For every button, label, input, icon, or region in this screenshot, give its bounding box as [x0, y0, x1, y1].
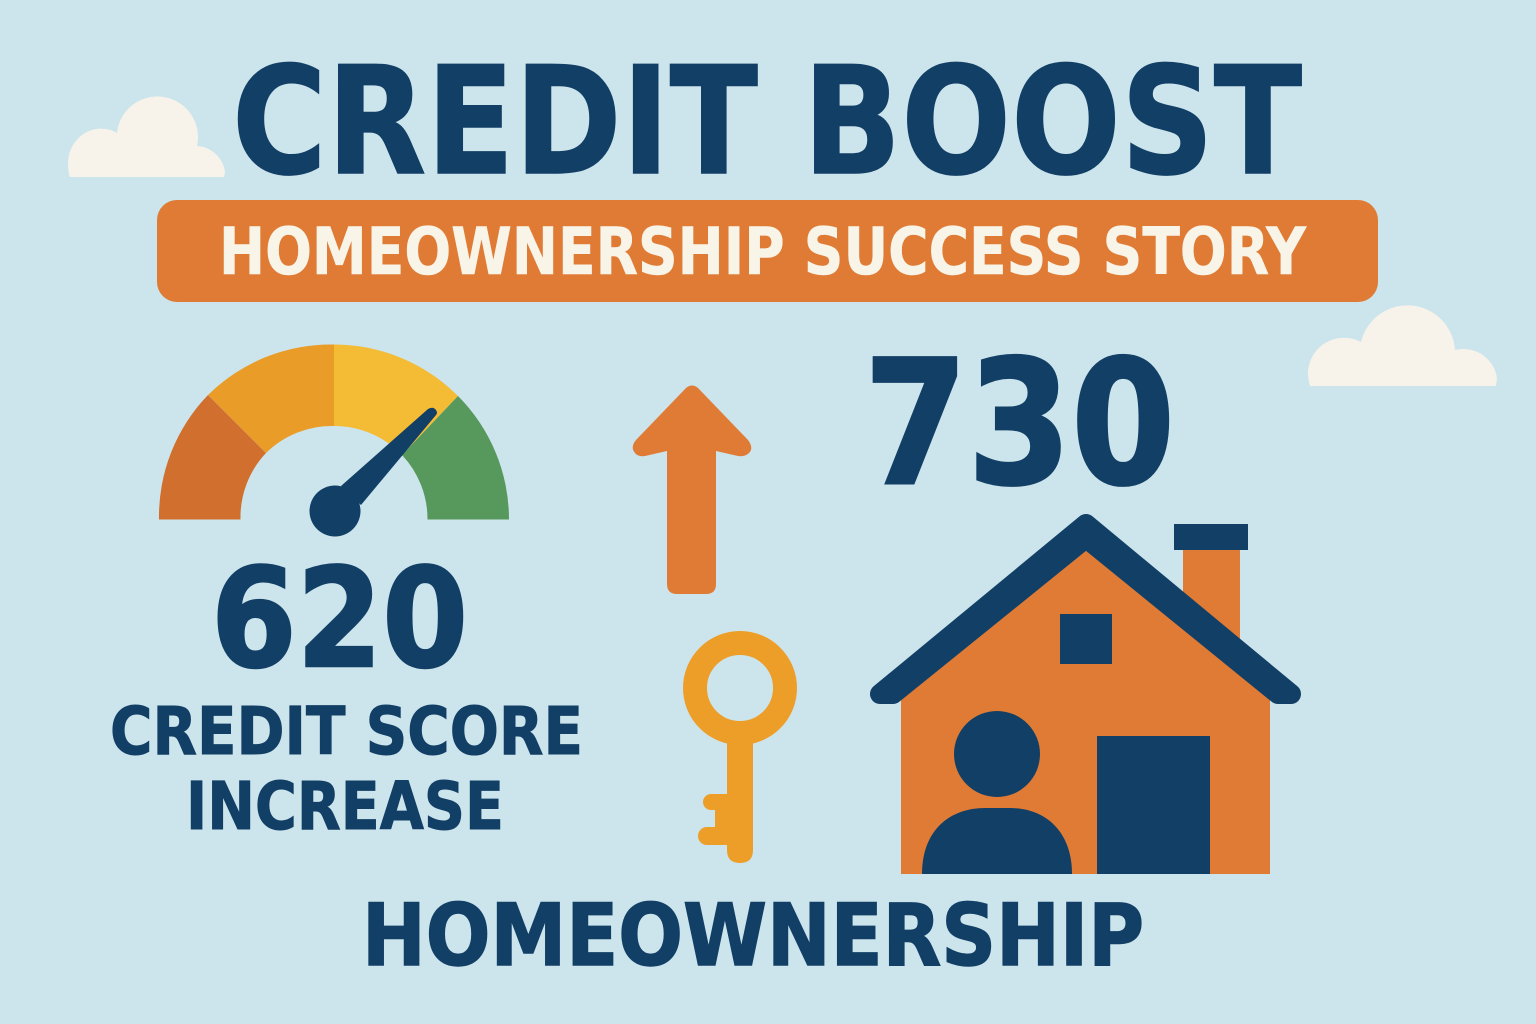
icon: key — [695, 643, 785, 863]
gauge needle — [310, 408, 437, 536]
gauge segment: yellow — [334, 344, 458, 455]
score 730: 730 — [864, 323, 1175, 524]
label: homeownership: HOMEOWNERSHIP — [362, 886, 1144, 986]
score 620: 620 — [211, 540, 468, 699]
label: credit score increase: CREDIT SCORE — [110, 693, 583, 770]
roof — [880, 524, 1291, 694]
gauge segment: red — [159, 395, 266, 520]
house body — [901, 540, 1270, 874]
icon: cloud right — [1308, 305, 1497, 386]
gauge segment: orange — [208, 344, 334, 453]
subtitle text: HOMEOWNERSHIP SUCCESS STORY — [219, 215, 1307, 290]
gauge — [159, 344, 509, 536]
window — [1060, 614, 1112, 664]
title: CREDIT BOOST — [232, 36, 1302, 209]
person — [922, 711, 1072, 874]
gauge segment: green — [402, 396, 509, 520]
subtitle banner — [157, 200, 1378, 302]
arrow up — [633, 386, 751, 594]
door — [1097, 736, 1210, 874]
label: credit score increase — [110, 693, 583, 845]
icon: house — [880, 524, 1291, 874]
chimney — [1174, 524, 1248, 655]
icon: cloud left — [68, 96, 225, 177]
label: credit score increase: INCREASE — [186, 768, 504, 845]
